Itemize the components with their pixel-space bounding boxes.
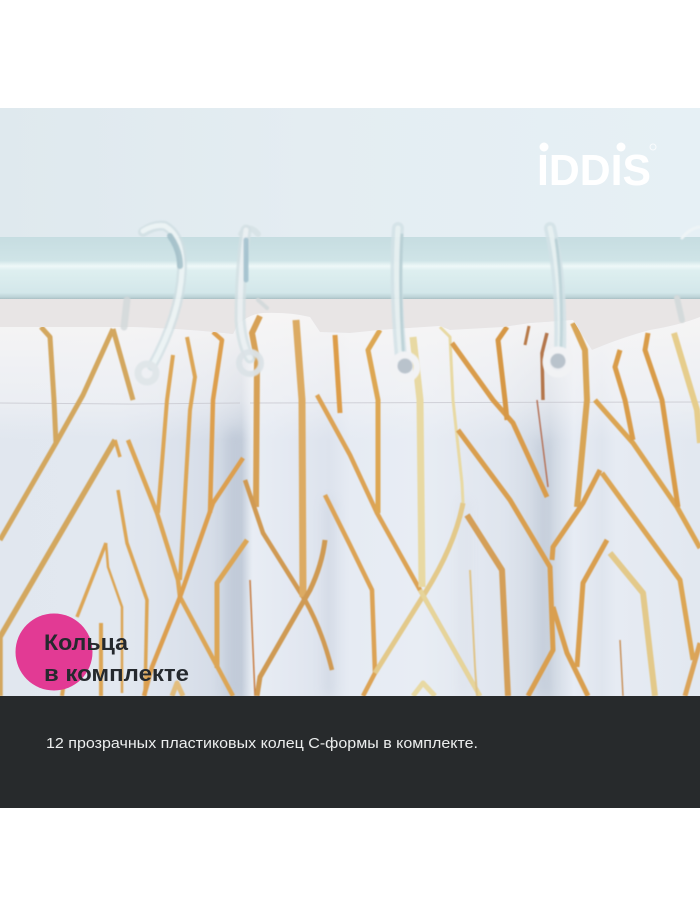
right panel lines [452,323,700,696]
middle panel lines [245,316,480,696]
plastic rings [124,226,700,382]
dark caption band [0,696,700,808]
ring 1 [124,226,182,382]
infographic canvas [0,108,700,808]
caption text: 12 прозрачных пластиковых колец С-формы в комплекте. [46,735,478,752]
logo: iddis: IDDIS [537,146,651,195]
curtain photo [0,108,700,696]
heading: в комплекте [44,661,189,686]
wall strip below rod [0,299,700,350]
ring 4 [546,228,570,374]
horizontal hem seam [0,402,700,404]
pink circle [16,614,92,690]
fold shadows [232,442,544,684]
center light lines [375,327,480,696]
curtain rod [0,237,700,299]
heading: Кольца [44,630,129,655]
heading [46,634,188,681]
gold geometric pattern [0,316,700,696]
ring 3 [393,228,417,379]
ring 5 [674,231,690,324]
ring 2 [239,228,267,374]
left panel lines [0,327,133,696]
curtain fabric [0,310,700,696]
wall background [0,108,700,240]
